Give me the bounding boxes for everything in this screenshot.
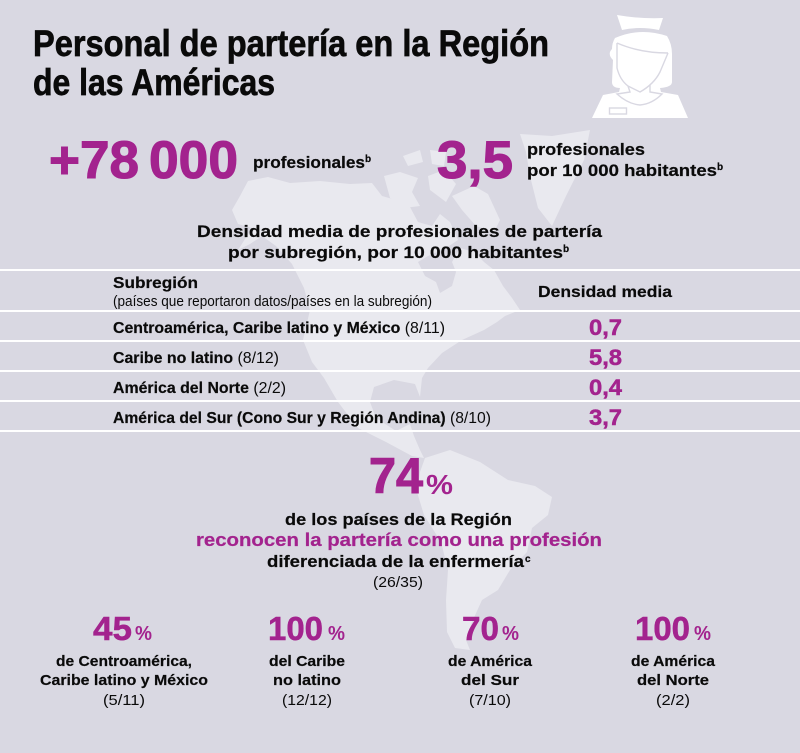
table row: Centroamérica: 0,7 [589, 315, 622, 340]
table row: América del Norte: 0,4 [589, 375, 623, 400]
subregion stat: Caribe no latino 100% [268, 610, 345, 709]
subregion stat: América del Sur 70% [448, 610, 533, 709]
table row: Caribe no latino [113, 345, 622, 370]
table row: Centroamérica [113, 315, 622, 340]
recognition text: c [525, 554, 531, 565]
subregion stat: Caribe no latino 100%: 100 [268, 610, 323, 647]
table heading: por subregión, por 10 000 habitantes [228, 243, 563, 262]
subregion stat: América del Norte 100%: del Norte [637, 672, 709, 689]
subregion stat: América del Sur 70%: 70 [462, 610, 499, 647]
stat: 3,5 per 10 000: por 10 000 habitantes [527, 161, 717, 180]
subregion stat: Caribe no latino 100%: no latino [273, 672, 341, 689]
subregion stat: América del Norte 100%: % [694, 623, 711, 645]
stat: 74%: % [426, 469, 453, 500]
table row: América del Sur [113, 405, 622, 430]
table heading: Densidad media de profesionales de partería [197, 222, 603, 241]
title: Personal de partería en la Región [33, 23, 549, 64]
table row: América del Norte: América del Norte (2/2) [113, 380, 286, 397]
subregion stat: Centroamérica 45%: Caribe latino y México [40, 672, 208, 689]
stat: 78 000 professionals: b [365, 154, 371, 165]
recognition text: (26/35) [373, 575, 423, 591]
subregion stat: América del Sur 70%: % [502, 623, 519, 645]
stat: 78 000 professionals: profesionales [253, 153, 365, 172]
table row: América del Sur: 3,7 [589, 405, 622, 430]
table heading [197, 222, 603, 262]
stat: 78 000 professionals: +78 [49, 131, 139, 190]
title [33, 23, 549, 103]
subregion stat: América del Sur 70%: del Sur [461, 672, 519, 689]
subregion stat: Centroamérica 45%: % [135, 623, 152, 645]
stat: 3,5 per 10 000: 3,5 [437, 131, 513, 190]
subregion stat: Centroamérica 45%: (5/11) [103, 693, 145, 709]
icon: midwife [592, 15, 688, 118]
table header: (países que reportaron datos/países en la subregión) [113, 294, 432, 310]
stat: 3,5 per 10 000: profesionales [527, 140, 645, 159]
subregion stat: América del Sur 70%: (7/10) [469, 693, 511, 709]
subregion stat: Centroamérica 45% [40, 610, 208, 709]
recognition text: diferenciada de la enfermería [267, 552, 525, 571]
table row: Caribe no latino: 5,8 [589, 345, 622, 370]
subregion stat: América del Norte 100% [631, 610, 716, 709]
recognition text: reconocen la partería como una profesión [196, 530, 602, 550]
title: de las Américas [33, 62, 275, 103]
subregion stat: Caribe no latino 100%: (12/12) [282, 693, 332, 709]
subregion stat: América del Norte 100%: (2/2) [656, 693, 690, 709]
map of the Americas [232, 130, 590, 650]
table row: América del Sur: América del Sur (Cono Sur y Región Andina) (8/10) [113, 410, 491, 427]
subregion stat: Caribe no latino 100%: del Caribe [269, 653, 345, 670]
table row: América del Norte [113, 375, 623, 400]
subregion stat: Centroamérica 45%: 45 [93, 610, 132, 647]
table heading: b [563, 244, 569, 255]
stat: 3,5 per 10 000 [437, 131, 723, 190]
recognition text [196, 510, 602, 591]
stat: 78 000 professionals: 000 [149, 131, 238, 190]
stat: 3,5 per 10 000: b [717, 162, 723, 173]
table row: Centroamérica: Centroamérica, Caribe latino y México (8/11) [113, 320, 445, 337]
table header [113, 275, 672, 310]
subregion stat: América del Sur 70%: de América [448, 653, 533, 670]
table header: Subregión [113, 275, 198, 292]
recognition text: de los países de la Región [285, 510, 512, 529]
subregion stat: América del Norte 100%: de América [631, 653, 716, 670]
subregion stat: Caribe no latino 100%: % [328, 623, 345, 645]
table row: Caribe no latino: Caribe no latino (8/12) [113, 350, 279, 367]
stat: 74%: 74 [369, 448, 423, 504]
stat: 74% [369, 448, 453, 504]
subregion stat: América del Norte 100%: 100 [635, 610, 690, 647]
subregion stat: Centroamérica 45%: de Centroamérica, [56, 653, 192, 670]
table row lines [0, 269, 800, 432]
stat: 78 000 professionals [49, 131, 371, 190]
table header: Densidad media [538, 284, 672, 301]
